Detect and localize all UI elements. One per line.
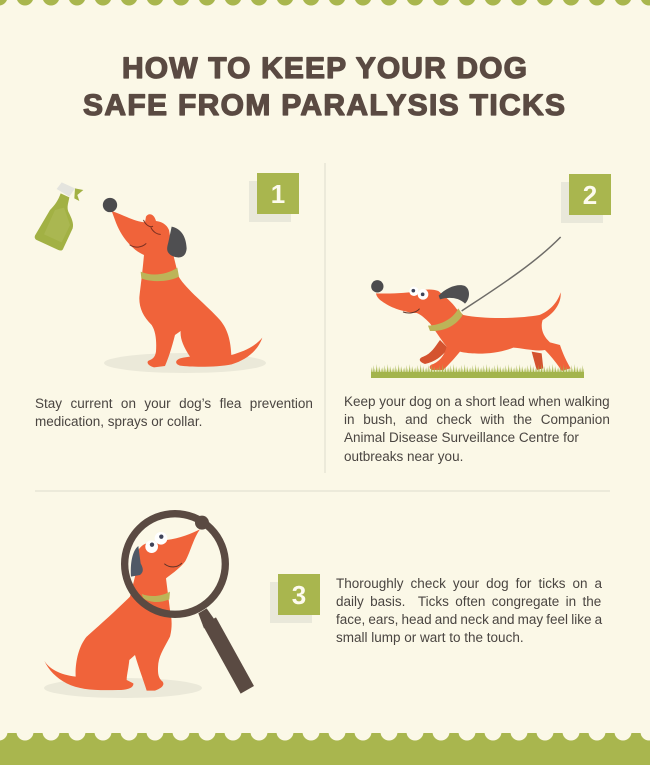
panel: step 2 bbox=[344, 174, 611, 464]
text block 1: Stay current on your dog’s flea prevention bbox=[35, 396, 313, 411]
ear bbox=[131, 546, 143, 577]
text block 2: outbreaks near you. bbox=[344, 449, 463, 464]
badge 1: 1 bbox=[271, 179, 285, 209]
eyes bbox=[145, 532, 167, 553]
badge 2 bbox=[561, 174, 611, 223]
grass bbox=[371, 364, 584, 378]
badge 1 bbox=[249, 173, 299, 222]
icon: spray bottle bbox=[35, 182, 83, 251]
top scalloped border bbox=[0, 0, 650, 8]
text block 3: Thoroughly check your dog for ticks on a bbox=[336, 576, 603, 591]
ear bbox=[167, 227, 187, 257]
text block 2: Animal Disease Surveillance Centre for bbox=[344, 430, 579, 445]
body bbox=[376, 289, 571, 371]
text block 1 bbox=[35, 396, 313, 429]
text block 3: face, ears, head and neck and may feel like a bbox=[336, 612, 603, 627]
panel: step 3 bbox=[44, 514, 603, 698]
ear bbox=[439, 285, 469, 304]
lead bbox=[462, 237, 561, 311]
title bbox=[83, 52, 565, 122]
text block 3: small lump or wart to the touch. bbox=[336, 630, 524, 645]
panel: step 1 bbox=[35, 173, 313, 429]
badge 3: 3 bbox=[292, 580, 306, 610]
illustration: dog under magnifying glass bbox=[44, 514, 254, 694]
text block 1: medication, sprays or collar. bbox=[35, 414, 202, 429]
bottom scalloped border bbox=[0, 725, 650, 765]
collar bbox=[428, 308, 463, 331]
far legs bbox=[420, 340, 543, 370]
collar bbox=[141, 268, 179, 281]
badge 3 bbox=[270, 574, 320, 623]
badge 2: 2 bbox=[583, 180, 597, 210]
text block 2: in bush, and check with the Companion bbox=[344, 412, 610, 427]
title: SAFE FROM PARALYSIS TICKS bbox=[83, 89, 565, 122]
eyes bbox=[409, 287, 428, 300]
text block 2 bbox=[344, 394, 610, 464]
text block 3: daily basis. Ticks often congregate in the bbox=[336, 594, 601, 609]
illustration: walking dog on lead bbox=[371, 237, 571, 371]
collar bbox=[142, 592, 170, 602]
nose bbox=[371, 280, 383, 292]
illustration: sitting dog with nose dot bbox=[103, 198, 262, 367]
nose bbox=[103, 198, 117, 212]
title: HOW TO KEEP YOUR DOG bbox=[122, 52, 527, 85]
magnifying glass bbox=[125, 514, 254, 694]
text block 3 bbox=[336, 576, 603, 645]
shadow under dog 1 bbox=[104, 353, 266, 373]
text block 2: Keep your dog on a short lead when walking bbox=[344, 394, 610, 409]
shadow under dog 3 bbox=[44, 678, 202, 698]
